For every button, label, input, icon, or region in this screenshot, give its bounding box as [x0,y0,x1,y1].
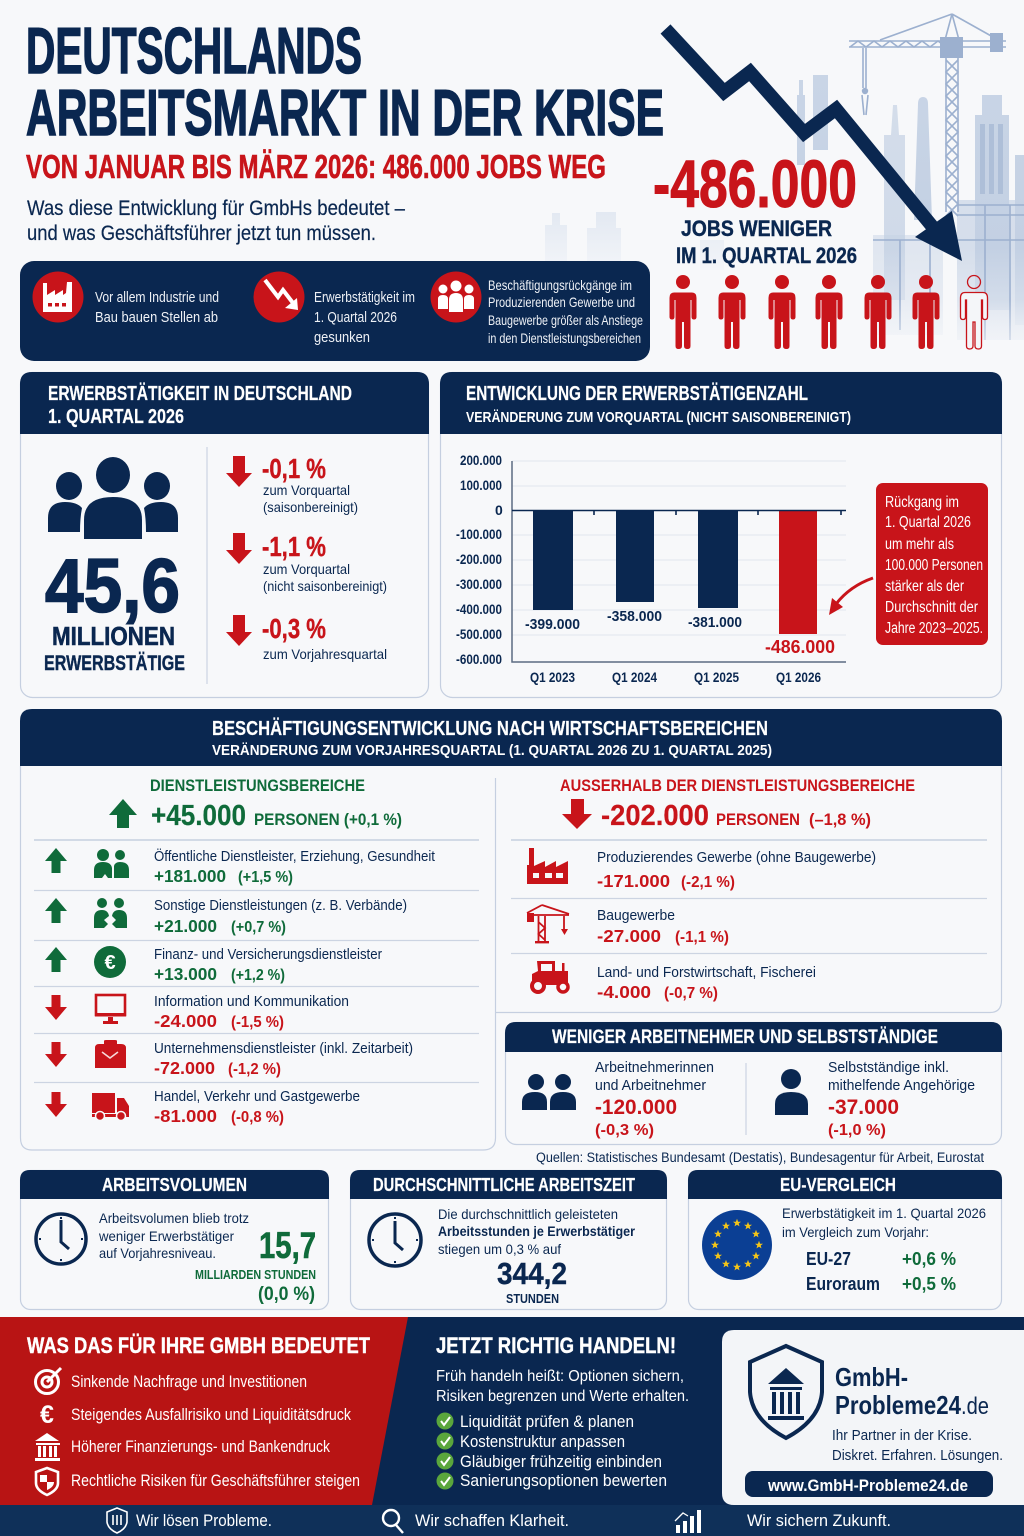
icon: clock [369,1214,421,1266]
text block [438,1206,635,1257]
panel: jetzt richtig handeln [436,1333,689,1490]
heading: ENTWICKLUNG DER ERWERBSTÄTIGENZAHL [466,382,808,405]
text block: im Vergleich zum Vorjahr: [782,1224,929,1240]
total: PERSONEN [716,810,800,829]
heading: WENIGER ARBEITNEHMER UND SELBSTSTÄNDIGE [552,1027,938,1048]
row: Finanzdienstleister: (+1,2 %) [231,967,285,984]
row: Handel und Verkehr: (-0,8 %) [231,1109,284,1126]
row: sonstige Dienstleistungen: (+0,7 %) [231,919,286,936]
row: öffentliche Dienstleister: (+1,5 %) [238,869,293,886]
bar chart: 0 [495,502,503,518]
bar chart: -100.000 [456,526,502,542]
callout: 100.000 Personen [885,557,983,574]
panel: EU-Vergleich [688,1170,1002,1310]
text block: auf Vorjahresniveau. [99,1245,216,1261]
panel: Entwicklung der Erwerbstätigenzahl [440,372,1002,698]
stat: Selbstständige [775,1060,975,1139]
stat: Arbeitnehmer: Arbeitnehmerinnen [595,1060,714,1076]
bar chart: -200.000 [456,551,502,567]
comparison values: EU-27 [806,1249,851,1269]
heading: ERWERBSTÄTIGKEIT IN DEUTSCHLAND [48,382,352,405]
bar chart: -486.000 [765,637,835,657]
bar chart: Q1 2026 [776,669,821,685]
row: Information und Kommunikation: Information und Kommunikation [154,994,349,1010]
figure [195,1225,316,1305]
icon: shield [36,1468,58,1495]
icon: target [36,1368,61,1394]
row: Baugewerbe: Baugewerbe [597,908,675,924]
text block: Arbeitsvolumen blieb trotz [99,1210,249,1226]
text: employment fell: gesunken [314,329,370,346]
bar chart: -358.000 [607,608,662,625]
figure: (0,0 %) [258,1284,315,1305]
stat: Arbeitnehmer: und Arbeitnehmer [595,1078,706,1094]
row: Finanzdienstleister [45,946,382,984]
bar chart: -381.000 [688,614,742,631]
text block [782,1205,986,1240]
row: Produzierendes Gewerbe: Produzierendes Gewerbe (ohne Baugewerbe) [597,850,876,866]
item: Rechtliche Risiken für Geschäftsführer steigen [71,1471,360,1490]
logo text: .de [961,1393,989,1420]
stat: not seasonally adjusted [226,531,387,594]
row: Handel und Verkehr [45,1089,360,1126]
text block [436,1368,689,1405]
row: Finanzdienstleister: € [104,952,116,974]
total: PERSONEN (+0,1 %) [254,810,402,829]
figure [497,1256,567,1306]
heading [466,382,851,426]
bar chart: -399.000 [525,616,580,633]
tagline: Ihr Partner in der Krise. [832,1428,972,1444]
panel: key messages band [20,261,650,361]
callout: Rückgang im [885,494,959,511]
item: Sinkende Nachfrage und Investitionen [71,1372,307,1391]
row: Produzierendes Gewerbe: (-2,1 %) [681,874,735,891]
icon: shield [107,1508,127,1533]
text: sector comparison: Baugewerbe größer als Anstiege [488,312,643,328]
stat: previous year: -0,3 % [262,613,326,644]
heading [48,382,352,428]
row: Unternehmensdienstleister: (-1,2 %) [228,1061,281,1078]
subtitle: VON JANUAR BIS MÄRZ 2026: 486.000 JOBS WEG [26,148,606,185]
callout [876,483,988,645]
total: +45.000 [151,800,246,832]
intro text: und was Geschäftsführer jetzt tun müssen. [27,222,376,245]
bar chart: Q1 2025 [694,669,739,685]
bar chart: 200.000 [460,452,502,468]
checklist: Sanierungsoptionen bewerten [460,1471,667,1490]
stat: Selbstständige: Selbstständige inkl. [828,1060,949,1076]
text block: stiegen um 0,3 % auf [438,1241,561,1257]
text: sector comparison [488,277,643,346]
big number: ERWERBSTÄTIGE [44,652,185,675]
item: Höherer Finanzierungs- und Bankendruck [71,1437,330,1456]
row: Baugewerbe: -27.000 [597,926,661,946]
comparison values: +0,5 % [902,1274,956,1294]
stat: Selbstständige: mithelfende Angehörige [828,1078,975,1094]
row: Finanzdienstleister: +13.000 [154,964,217,984]
row: Landwirtschaft: Land- und Forstwirtschaft, Fischerei [597,965,816,981]
text: industry: Vor allem Industrie und [95,289,219,306]
big number: MILLIONEN [52,621,175,651]
bar chart [456,452,846,685]
figure: STUNDEN [506,1292,559,1306]
row: Landwirtschaft: -4.000 [597,982,651,1002]
heading: DIENSTLEISTUNGSBEREICHE [150,776,365,795]
slogan: Wir sichern Zukunft. [747,1511,891,1530]
callout: stärker als der [885,578,964,595]
icon: EU flag [702,1210,772,1280]
icon: clock [36,1214,86,1264]
callout: um mehr als [885,536,954,553]
row: Information und Kommunikation: -24.000 [154,1011,217,1031]
title: ARBEITSMARKT IN DER KRISE [26,76,664,149]
icon: euro: € [40,1401,54,1429]
row: sonstige Dienstleistungen [45,898,407,936]
intro text [27,197,405,245]
figure: MILLIARDEN STUNDEN [195,1268,316,1282]
row: Produzierendes Gewerbe: -171.000 [597,871,670,891]
checklist [436,1412,667,1490]
panel: Handlungsband navy background [0,1317,1024,1505]
total: (–1,8 %) [809,810,871,829]
row: Produzierendes Gewerbe [527,848,876,891]
icon: people [48,457,178,539]
stat: seasonally adjusted: (saisonbereinigt) [263,499,358,515]
arrow: callout pointer [829,578,873,615]
row: Information und Kommunikation: (-1,5 %) [231,1014,284,1031]
item: Steigendes Ausfallrisiko und Liquiditätsdruck [71,1405,351,1424]
stat: seasonally adjusted [226,453,358,515]
stat: Arbeitnehmer: -120.000 [595,1096,677,1119]
icon: bar chart [675,1510,701,1533]
footer band [0,1505,1024,1536]
callout: Jahre 2023–2025. [885,620,983,637]
total: -202.000 [601,800,709,832]
panel: Erwerbstätigkeit [20,372,429,698]
panel: Beschäftigungsentwicklung heading [20,709,1002,766]
bar chart: 100.000 [460,477,502,493]
stat: seasonally adjusted: zum Vorquartal [263,482,350,498]
logo text [835,1362,989,1420]
stat: not seasonally adjusted: zum Vorquartal [263,561,350,577]
row: Unternehmensdienstleister [45,1040,413,1078]
icon: falling zigzag arrow [666,29,962,261]
stat: not seasonally adjusted: -1,1 % [262,531,326,562]
text block: weniger Erwerbstätiger [98,1228,234,1244]
icon: shield with bank [750,1346,822,1438]
text block: Die durchschnittlich geleisteten [438,1206,618,1222]
text: employment fell: Erwerbstätigkeit im [314,289,415,306]
text: employment fell: 1. Quartal 2026 [314,309,397,326]
icon: factory [32,272,84,322]
row: Information und Kommunikation [45,994,349,1031]
logo text: Probleme24 [835,1390,961,1420]
row: Landwirtschaft: (-0,7 %) [664,985,718,1002]
icon: bank [35,1433,60,1461]
stat: Arbeitnehmer [522,1060,714,1139]
panel: außerhalb der Dienstleistungsbereiche [496,766,1002,1012]
bar chart: Q1 2023 [530,669,575,685]
panel: Dienstleistungsbereiche [20,766,496,1150]
figure: 344,2 [497,1256,567,1291]
text: sector comparison: Beschäftigungsrückgänge im [488,277,632,293]
text: industry [95,289,219,326]
comparison values [806,1249,956,1294]
icon: group of people [430,272,482,322]
background skyline with crane [520,14,1024,370]
row: Finanzdienstleister: Finanz- und Versicherungsdienstleister [154,947,382,963]
panel: durchschnittliche Arbeitszeit [350,1170,667,1310]
panel: Beschäftigungsentwicklung heading: BESCHÄFTIGUNGSENTWICKLUNG NACH WIRTSCHAFTSBEREICHEN [212,717,768,740]
tagline [832,1428,1003,1464]
icon: row of people [670,275,988,349]
callout: 1. Quartal 2026 [885,514,971,531]
text: employment fell [314,289,415,346]
stat: Selbstständige: (-1,0 %) [828,1122,886,1139]
row: öffentliche Dienstleister [45,847,435,886]
source note: Quellen: Statistisches Bundesamt (Destatis), Bundesagentur für Arbeit, Eurostat [536,1150,984,1165]
bar chart: -500.000 [456,626,502,642]
panel: weniger Arbeitnehmer und Selbstständige [505,1022,1002,1144]
slogan: Wir lösen Probleme. [136,1511,272,1530]
panel: Beschäftigungsentwicklung heading: VERÄNDERUNG ZUM VORJAHRESQUARTAL (1. QUARTAL 2026 ZU 1. QUARTAL 2025) [212,742,772,759]
panel: was das für Ihre GmbH bedeutet [0,1317,408,1505]
key figure [653,147,857,268]
row: Baugewerbe: (-1,1 %) [675,929,729,946]
logo text: GmbH- [835,1362,908,1392]
row: Handel und Verkehr: Handel, Verkehr und Gastgewerbe [154,1089,360,1105]
stat: previous year: zum Vorjahresquartal [263,646,387,662]
bar chart: -600.000 [456,651,502,667]
checklist: Liquidität prüfen & planen [460,1412,634,1431]
row: Landwirtschaft [532,961,816,1002]
title [26,14,664,149]
heading: EU-VERGLEICH [780,1175,896,1195]
row: öffentliche Dienstleister: Öffentliche Dienstleister, Erziehung, Gesundheit [154,847,435,865]
row: sonstige Dienstleistungen: +21.000 [154,916,217,936]
big number: 45,6 [45,544,180,629]
row: öffentliche Dienstleister: +181.000 [154,866,226,886]
row: Handel und Verkehr: -81.000 [154,1106,217,1126]
text: sector comparison: Produzierenden Gewerbe und [488,294,635,310]
stat: not seasonally adjusted: (nicht saisonbereinigt) [263,578,387,594]
title: DEUTSCHLANDS [26,14,362,87]
text block: Erwerbstätigkeit im 1. Quartal 2026 [782,1205,986,1221]
heading: WAS DAS FÜR IHRE GMBH BEDEUTET [27,1333,370,1358]
figure: 15,7 [259,1225,316,1266]
row: sonstige Dienstleistungen: Sonstige Dienstleistungen (z. B. Verbände) [154,898,407,914]
big number [44,544,185,675]
icon: falling arrow [254,272,304,322]
text block [98,1210,249,1261]
heading: 1. QUARTAL 2026 [48,406,184,428]
bar chart: -400.000 [456,601,502,617]
total [109,799,402,832]
total [562,799,871,832]
text block: Arbeitsstunden je Erwerbstätiger [438,1223,635,1239]
icon: magnifier [383,1510,403,1533]
text block: Früh handeln heißt: Optionen sichern, [436,1368,684,1385]
url button [745,1471,993,1497]
comparison values: +0,6 % [902,1249,956,1269]
intro text: Was diese Entwicklung für GmbHs bedeutet – [27,197,405,220]
bar chart: Q1 2024 [612,669,657,685]
heading: AUSSERHALB DER DIENSTLEISTUNGSBEREICHE [560,776,915,795]
heading: DURCHSCHNITTLICHE ARBEITSZEIT [373,1175,635,1195]
bar chart: -300.000 [456,576,502,592]
text block: Risiken begrenzen und Werte erhalten. [436,1388,689,1405]
callout: Durchschnitt der [885,599,978,616]
heading: JETZT RICHTIG HANDELN! [436,1333,676,1358]
slogan: Wir schaffen Klarheit. [415,1511,569,1530]
checklist: Gläubiger frühzeitig einbinden [460,1452,662,1471]
key figure: IM 1. QUARTAL 2026 [676,243,857,268]
tagline: Diskret. Erfahren. Lösungen. [832,1448,1003,1464]
stat: Selbstständige: -37.000 [828,1096,899,1119]
row: Baugewerbe [527,905,729,946]
row: Unternehmensdienstleister: -72.000 [154,1058,215,1078]
key figure: JOBS WENIGER [681,216,832,241]
text: sector comparison: in den Dienstleistungsbereichen [488,330,641,346]
stat: previous year [226,613,387,662]
row: Unternehmensdienstleister: Unternehmensdienstleister (inkl. Zeitarbeit) [154,1041,413,1057]
heading: VERÄNDERUNG ZUM VORQUARTAL (NICHT SAISONBEREINIGT) [466,409,851,426]
text: industry: Bau bauen Stellen ab [95,309,218,326]
stat: seasonally adjusted: -0,1 % [262,453,326,484]
checklist: Kostenstruktur anpassen [460,1432,625,1451]
key figure: -486.000 [653,147,857,222]
comparison values: Euroraum [806,1274,880,1294]
stat: Arbeitnehmer: (-0,3 %) [595,1122,654,1139]
heading: ARBEITSVOLUMEN [102,1175,247,1195]
url button: www.GmbH-Probleme24.de [767,1476,968,1495]
panel: logo card [722,1330,1024,1505]
panel: Arbeitsvolumen [20,1170,329,1310]
